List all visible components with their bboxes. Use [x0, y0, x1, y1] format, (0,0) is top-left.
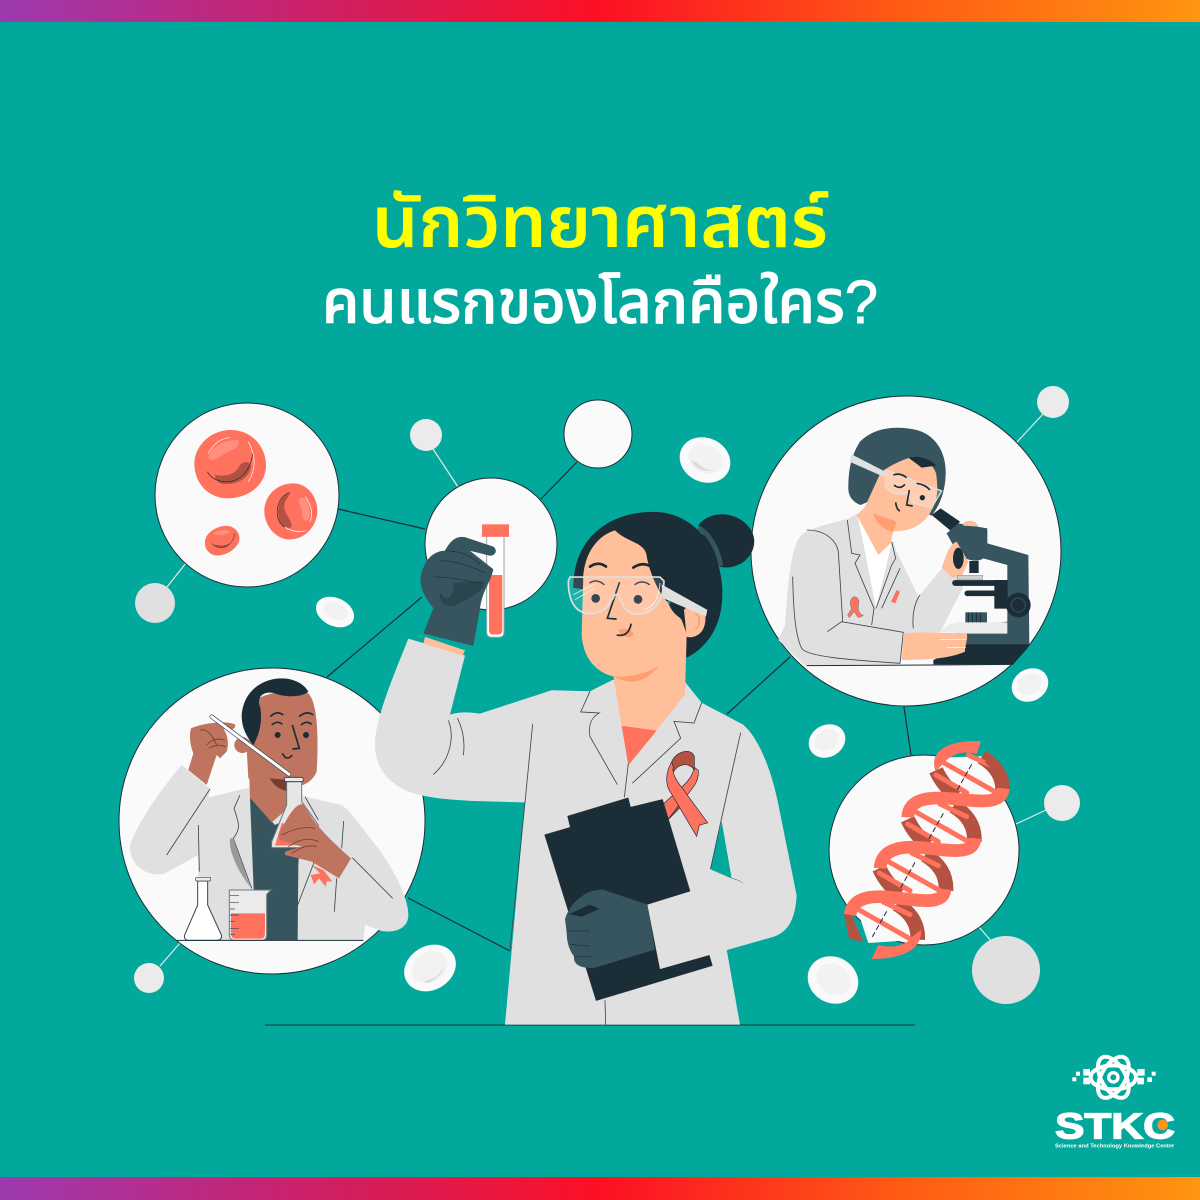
- panel: test tube circle: [425, 478, 557, 610]
- clipboard: [544, 797, 713, 1001]
- lower glove: [565, 890, 655, 968]
- ground line: [265, 1024, 915, 1026]
- satellite dots: [134, 386, 1080, 1004]
- neck: [613, 635, 687, 731]
- panel: DNA circle: [829, 741, 1019, 959]
- panel: scientist with microscope: [751, 396, 1061, 706]
- icon: atom: [1091, 1052, 1136, 1103]
- logo: [1055, 1052, 1175, 1150]
- illustration: flask scientist: [130, 678, 408, 940]
- white blood cells: [311, 429, 1054, 1013]
- illustration: microscope scientist: [778, 428, 1031, 666]
- ribbon: [663, 751, 708, 836]
- coat lines: [433, 691, 756, 1025]
- gap under arm: [710, 821, 732, 879]
- helix segment upper: [908, 804, 977, 845]
- title: [322, 183, 878, 336]
- hair back and bun: [573, 512, 754, 658]
- icon: DNA helix: [844, 741, 1008, 959]
- icons: red cells: [194, 430, 317, 556]
- upper glove: [420, 537, 496, 646]
- icon: pixel squares: [1072, 1069, 1156, 1084]
- blush: [618, 629, 633, 637]
- test tube: [482, 524, 509, 637]
- bottom gradient bar: [0, 1177, 1200, 1200]
- icon: small red cell: [205, 526, 239, 556]
- raised sleeve: [375, 639, 552, 803]
- top gradient bar: [0, 0, 1200, 22]
- icon: medium red cell: [264, 483, 317, 539]
- helix segment top: [936, 755, 1005, 796]
- front ribbon bands: [850, 788, 1003, 915]
- helix segment bottom: [856, 902, 920, 943]
- tagline: Science and Technology Knowledge Center: [1055, 1144, 1174, 1150]
- connector lines: [160, 414, 1046, 966]
- face: [582, 530, 687, 677]
- lower sleeve: [647, 879, 796, 969]
- lab coat torso: [505, 680, 797, 1025]
- safety goggles: [568, 577, 707, 617]
- illustration: main scientist: [375, 512, 797, 1025]
- ear: [684, 605, 705, 637]
- title line 1: นักวิทยาศาสตร์: [372, 183, 829, 263]
- helix segment lower: [879, 853, 948, 894]
- panel: red blood cells: [155, 403, 339, 587]
- strand tails: [844, 761, 1008, 942]
- icon: large red cell: [194, 430, 266, 498]
- facial features: [590, 564, 653, 635]
- title line 2: คนแรกของโลกคือใคร?: [322, 268, 878, 336]
- icon: orange dot: [1157, 1120, 1168, 1130]
- panel: scientist with flask: [119, 668, 425, 974]
- wordmark: STKC: [1055, 1105, 1175, 1146]
